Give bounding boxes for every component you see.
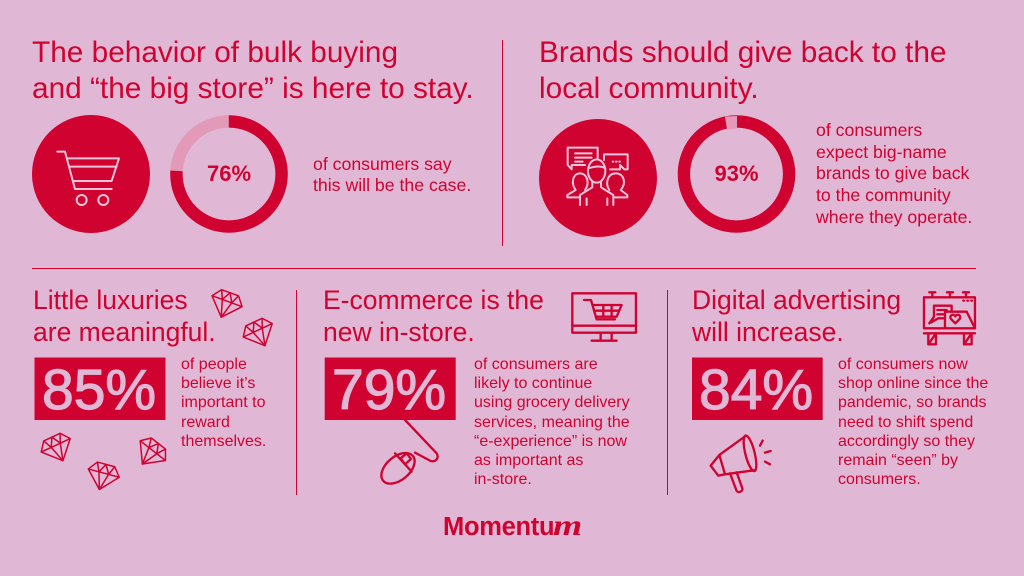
- icon: computer mouse: [376, 420, 438, 490]
- text: 85% description: important to: [181, 394, 266, 411]
- text: 93% description: where they operate.: [815, 207, 972, 227]
- text: 79% description: “e-experience” is now: [474, 433, 627, 450]
- text: 93% description: of consumers: [816, 120, 922, 140]
- text: 85% description: believe it’s: [181, 375, 255, 392]
- text: 84% description: accordingly so they: [838, 433, 975, 450]
- icon: megaphone: [711, 434, 771, 492]
- panel: give back: [539, 36, 972, 237]
- text: 84% description: consumers.: [838, 471, 921, 488]
- icon: people talking in circle: [539, 119, 657, 237]
- text: 84% description: pandemic, so brands: [838, 394, 987, 411]
- text: 79% description: of consumers are: [474, 356, 598, 373]
- heading: e-commerce: new in-store.: [323, 317, 475, 347]
- stat box: 84%: 84%: [699, 358, 813, 422]
- text: 79% description: using grocery delivery: [474, 394, 630, 411]
- text: 93% description: brands to give back: [816, 163, 970, 183]
- text: 84% description: of consumers now: [838, 356, 968, 373]
- icon: billboard: [924, 292, 975, 344]
- text: 79% description: services, meaning the: [474, 414, 630, 431]
- panel: bulk buying: [32, 36, 474, 233]
- heading: bulk buying: and “the big store” is here to stay.: [32, 72, 474, 105]
- icon: shopping cart in circle: [32, 115, 150, 233]
- donut chart: 76%: 76%: [207, 161, 251, 186]
- heading: bulk buying: The behavior of bulk buying: [32, 36, 398, 69]
- panel: e-commerce: [323, 285, 636, 490]
- heading: little luxuries: are meaningful.: [33, 317, 216, 347]
- heading: give back: Brands should give back to the: [539, 36, 946, 69]
- text: 85% description: reward: [181, 414, 230, 431]
- text: 93% description: to the community: [816, 185, 951, 205]
- text: 85% description: themselves.: [181, 433, 266, 450]
- heading: digital advertising: will increase.: [691, 317, 844, 347]
- text: 79% description: in-store.: [474, 471, 532, 488]
- donut chart: 93%: 93%: [714, 161, 759, 186]
- text: 84% description: need to shift spend: [838, 414, 973, 431]
- text: 84% description: shop online since the: [838, 375, 988, 392]
- text: 76% description: of consumers say: [313, 154, 452, 174]
- heading: e-commerce: E-commerce is the: [323, 285, 544, 315]
- stat box: 85%: 85%: [42, 358, 156, 422]
- heading: give back: local community.: [539, 72, 759, 105]
- donut chart: 93%: [684, 116, 789, 227]
- logo: Momentum: [443, 509, 582, 542]
- icon: diamonds: [37, 287, 279, 494]
- text: 79% description: likely to continue: [474, 375, 592, 392]
- logo: Momentum: m: [553, 509, 582, 542]
- donut chart: 76%: [176, 121, 282, 227]
- heading: little luxuries: Little luxuries: [33, 285, 188, 315]
- text: 84% description: remain “seen” by: [838, 452, 958, 469]
- text: 93% description: expect big-name: [816, 142, 947, 162]
- panel: digital advertising: [691, 285, 988, 492]
- logo: Momentum: Momentu: [443, 513, 554, 541]
- text: 85% description: of people: [181, 356, 247, 373]
- panel: little luxuries: [33, 285, 279, 494]
- stat box: 79%: 79%: [332, 358, 446, 422]
- heading: digital advertising: Digital advertising: [692, 285, 901, 315]
- text: 79% description: as important as: [474, 452, 583, 469]
- icon: monitor with cart: [572, 293, 636, 341]
- text: 76% description: this will be the case.: [313, 175, 471, 195]
